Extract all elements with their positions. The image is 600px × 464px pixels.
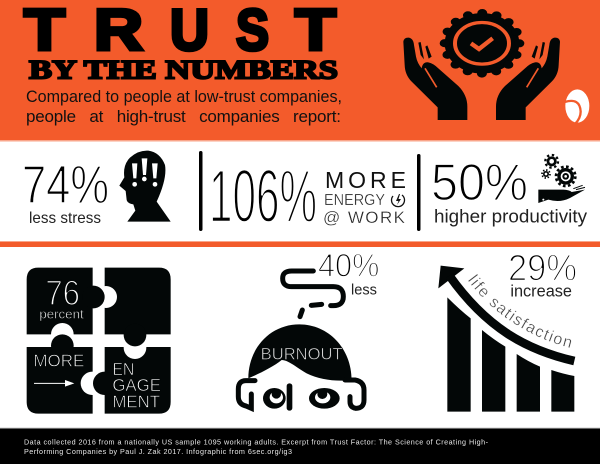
stat: 106% more energy at work: ENERGY <box>324 192 385 209</box>
graphic: rising life satisfaction chart: life satisfaction <box>468 274 572 348</box>
stat: 106% more energy at work: MORE <box>325 167 406 193</box>
icon: power cycle <box>392 194 405 207</box>
panel: orange header <box>0 0 600 142</box>
divider <box>199 151 202 231</box>
stat: 50% higher productivity: higher productivity <box>434 206 588 226</box>
graphic: puzzle 76 percent more engagement: percent <box>39 306 84 321</box>
icon: logo <box>565 89 589 124</box>
hair <box>248 324 352 381</box>
stat: 106% more energy at work: 106% <box>209 154 317 238</box>
graphic: rising life satisfaction chart <box>438 248 577 412</box>
panel: footer source note <box>0 428 600 464</box>
graphic: puzzle 76 percent more engagement: MENT <box>112 392 160 412</box>
graphic: puzzle 76 percent more engagement: 76 <box>45 274 80 313</box>
icon: hand with gears <box>538 155 585 203</box>
stat: 74% less stress: 74% <box>22 155 109 215</box>
title: TRUST <box>24 0 336 63</box>
eyes <box>263 383 340 411</box>
graphic: rising life satisfaction chart: increase <box>510 283 572 301</box>
graphic: puzzle 76 percent more engagement <box>27 268 171 414</box>
panel: footer source note: Data collected 2016 from a nationally US sample 1095 working adults. Excerpt from Trust Factor: The Science of Creating High- <box>24 438 489 446</box>
heading: by the numbers: BY THE NUMBERS <box>29 56 338 84</box>
stat: 74% less stress: less stress <box>29 210 101 227</box>
smoke and ears <box>238 271 364 408</box>
icon: hands holding badge <box>403 13 560 120</box>
graphic: rising life satisfaction chart: 29% <box>508 248 577 289</box>
graphic: puzzle 76 percent more engagement: EN <box>112 359 134 379</box>
stat: 74% less stress <box>22 155 109 227</box>
stat: 50% higher productivity: 50% <box>431 154 528 212</box>
graphic: puzzle 76 percent more engagement: MORE <box>33 351 84 371</box>
orange band <box>0 241 600 247</box>
text: intro: people at high-trust companies report: <box>26 107 341 126</box>
graphic: burnout head: BURNOUT <box>261 344 343 363</box>
stat: 50% higher productivity <box>431 154 588 226</box>
graphic: puzzle 76 percent more engagement: GAGE <box>112 375 161 395</box>
text: intro: Compared to people at low-trust companies, <box>26 87 342 106</box>
panel: footer source note: Performing Companies by Paul J. Zak 2017. Infographic from 6sec.org/ig3 <box>24 447 292 456</box>
graphic: burnout head <box>238 248 379 411</box>
stat: 106% more energy at work: @ WORK <box>323 208 406 227</box>
text: intro <box>26 87 342 126</box>
graphic: burnout head: less <box>351 282 377 298</box>
graphic: burnout head: 40% <box>318 248 379 284</box>
divider <box>417 154 420 231</box>
icon: head with exclamation marks <box>119 151 171 222</box>
